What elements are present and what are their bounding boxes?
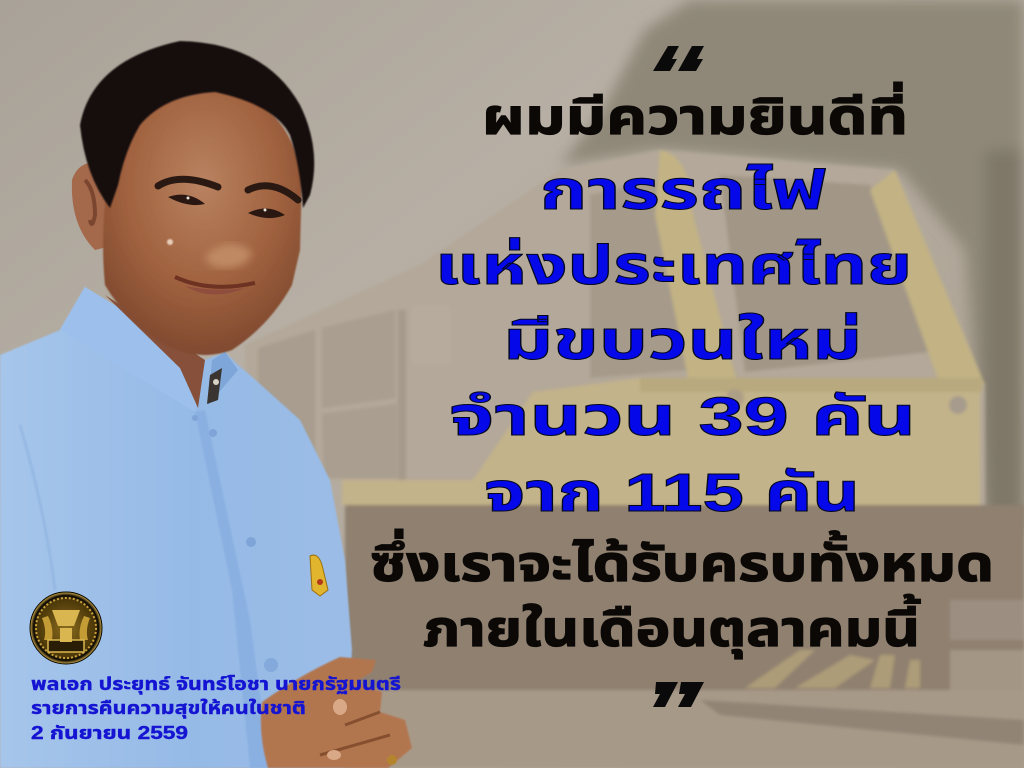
line: within this October: ภายในเดือนตุลาคมนี้ (423, 594, 921, 659)
cheek highlight (167, 239, 173, 245)
pendant at neck (207, 368, 222, 404)
caption line: programme: รายการคืนความสุขให้คนในชาติ (31, 698, 306, 719)
yellow lower body (342, 378, 980, 505)
portrait: man in light blue shirt (0, 41, 412, 768)
hair (80, 41, 314, 208)
icon: government seal (30, 592, 102, 664)
placket (195, 410, 270, 768)
eyes (168, 195, 205, 205)
shirt buttons (192, 415, 198, 421)
hazard stripes (745, 650, 920, 688)
line: intro: ผมมีความยินดีที่ (482, 82, 908, 145)
ballast and rails (345, 690, 1024, 768)
quote text (370, 82, 994, 659)
caption line: date: 2 กันยายน 2559 (31, 723, 188, 743)
trees (560, 0, 1024, 530)
windscreen (590, 180, 690, 378)
headlights (949, 396, 967, 414)
pin (310, 555, 328, 596)
sleeve shadow (20, 425, 55, 590)
ear (72, 162, 115, 250)
dark undercarriage (345, 505, 1024, 690)
clasped hands (261, 657, 412, 768)
neck (105, 295, 205, 408)
line: 39 units: จำนวน 39 คัน (449, 387, 916, 447)
opening quotation mark (653, 46, 704, 71)
train roof and cab (245, 150, 985, 505)
nose (205, 244, 252, 268)
closing quotation mark (653, 682, 704, 707)
collar (60, 287, 205, 412)
side panels (258, 330, 315, 470)
shirt (0, 287, 352, 768)
line: of Thailand: แห่งประเทศไทย (435, 236, 912, 296)
caption: speaker and date (31, 674, 401, 743)
face (103, 90, 302, 355)
line: has new trains: มีขบวนใหม่ (503, 311, 862, 371)
line: State Railway: การรถไฟ (540, 161, 826, 221)
brows (158, 179, 218, 187)
line: we will receive all: ซึ่งเราจะได้รับครบทั้งหมด (370, 529, 994, 592)
caption line: speaker name: พลเอก ประยุทธ์ จันทร์โอชา นายกรัฐมนตรี (31, 674, 401, 695)
line: of 115 units: จาก 115 คัน (484, 463, 860, 523)
yellow stripes on cab (655, 150, 736, 378)
mouth (175, 277, 255, 287)
